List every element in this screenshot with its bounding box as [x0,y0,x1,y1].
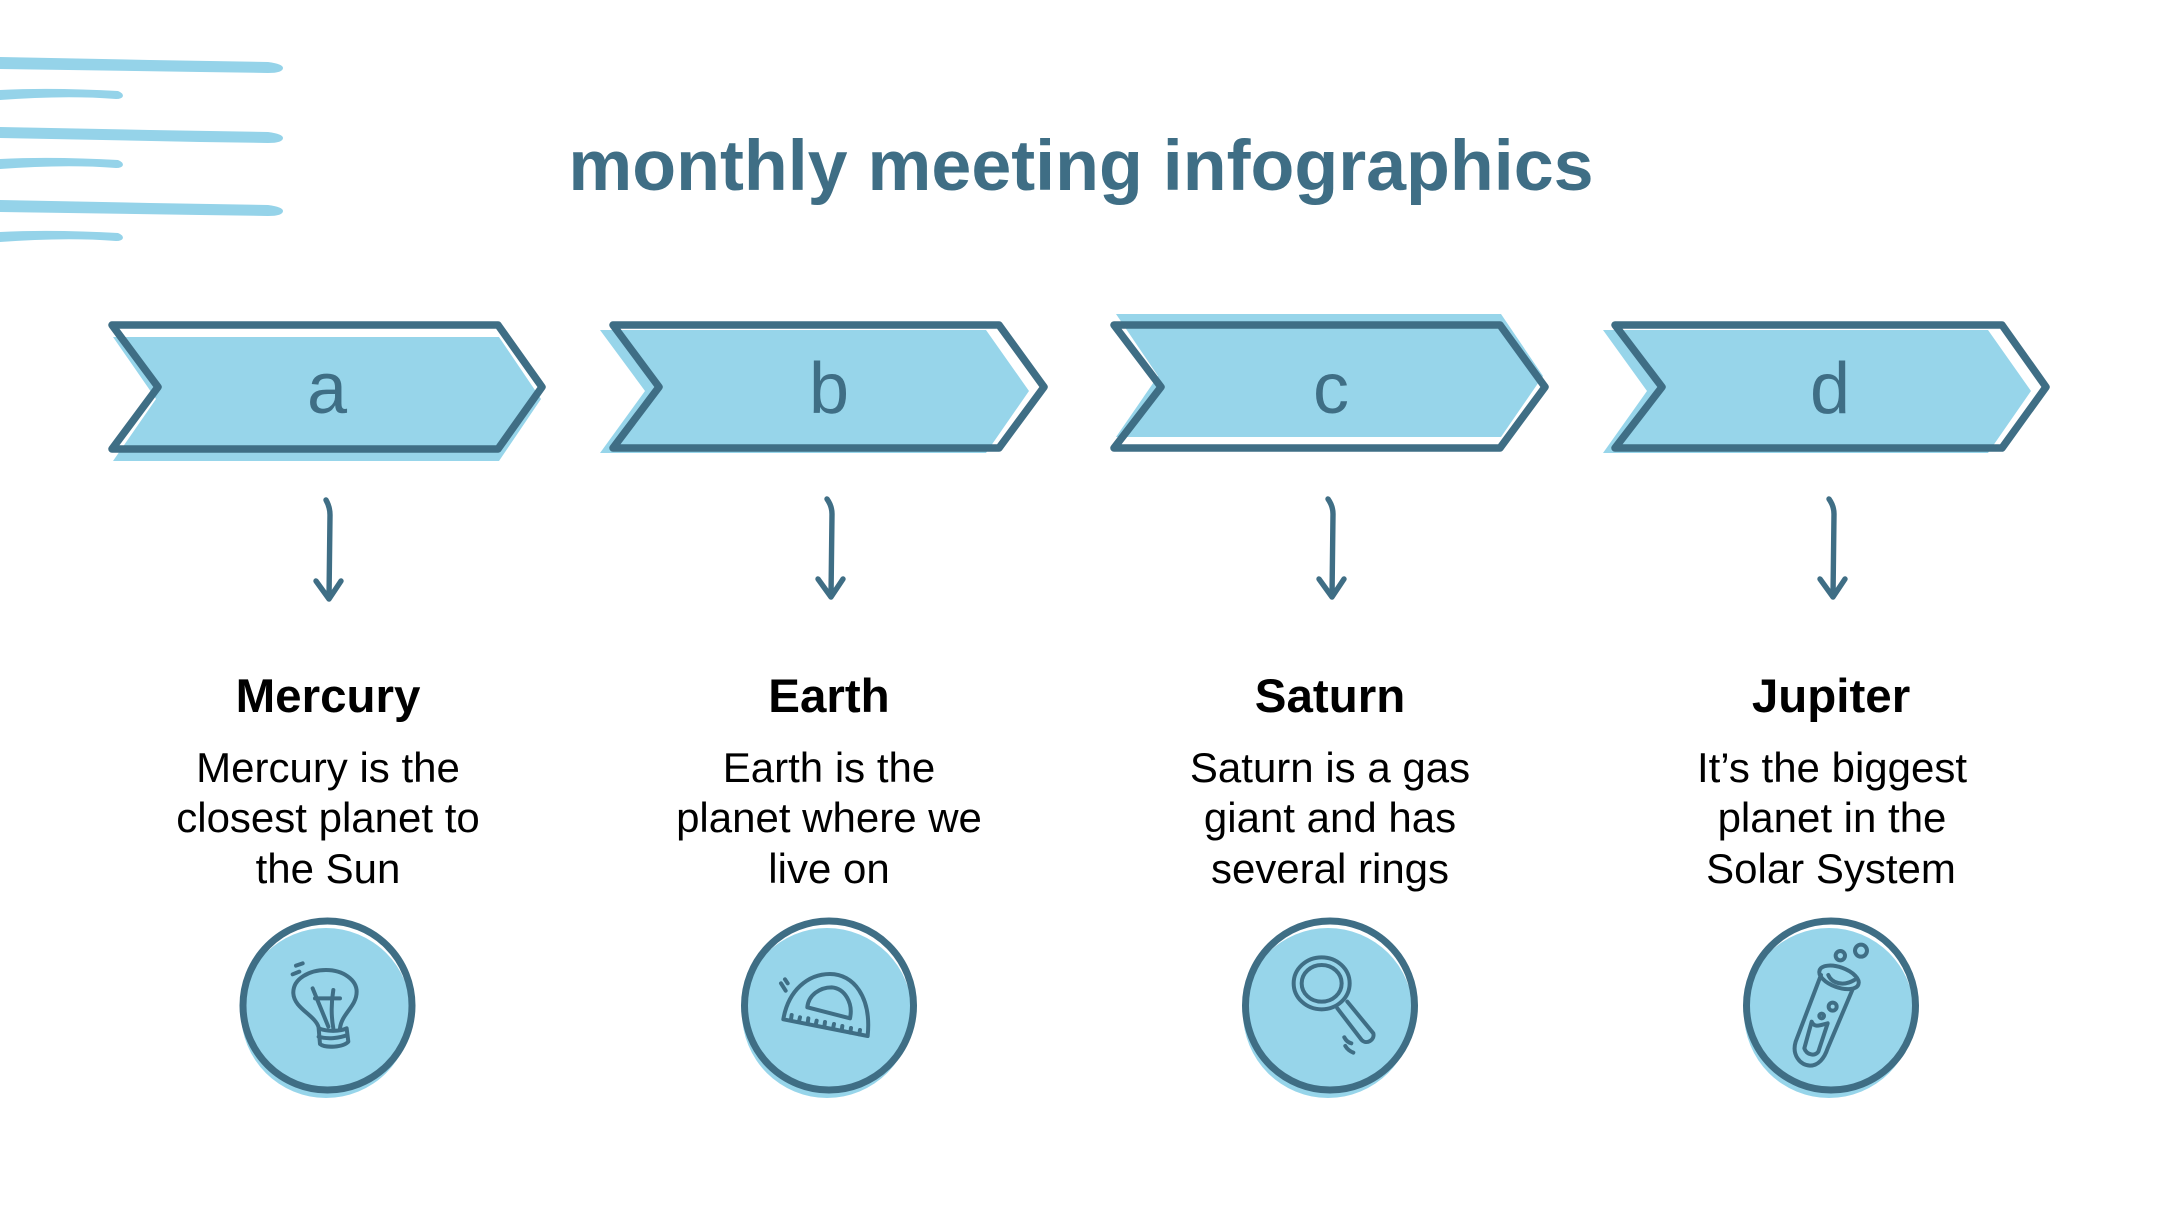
description: Mercury: Mercury is the [196,744,460,791]
chevron c [1114,314,1545,448]
description: Saturn: Saturn is a gas [1190,744,1470,791]
chevron c: c [1313,349,1349,429]
description: Earth: planet where we [676,794,982,841]
description: Jupiter: planet in the [1718,794,1946,841]
chevron a: a [307,349,348,429]
decorative brush strokes [0,57,283,242]
heading: Jupiter: Jupiter [1752,670,1910,723]
description: Jupiter: Solar System [1706,845,1956,892]
heading: Mercury: Mercury [236,670,421,723]
arrow down [316,500,341,599]
arrow down [1820,499,1845,597]
description: Mercury: the Sun [256,845,400,892]
chevron b [600,325,1044,453]
description: Earth: live on [768,845,890,892]
icon: test tube [1744,921,1916,1098]
chevron b: b [809,349,849,429]
panel: Jupiter [1603,325,2046,1098]
description: Jupiter: It’s the biggest [1697,744,1967,791]
arrow down [818,499,843,597]
icon: light bulb [241,921,412,1098]
chevron d: d [1810,349,1850,429]
heading: Earth: Earth [768,670,890,723]
description: Mercury: closest planet to [176,794,480,841]
panel: Saturn [1114,314,1545,1098]
icon: magnifying glass [1243,921,1414,1098]
description: Saturn: several rings [1211,845,1449,892]
description: Earth: Earth is the [723,744,935,791]
arrow down [1319,499,1344,597]
chevron a [112,325,542,461]
title: monthly meeting infographics [568,126,1594,206]
heading: Saturn: Saturn [1255,670,1405,723]
panel: Earth [600,325,1044,1098]
icon: protractor [742,921,914,1098]
panel: Mercury [112,325,542,1098]
description: Saturn: giant and has [1204,794,1456,841]
chevron d [1603,325,2046,453]
